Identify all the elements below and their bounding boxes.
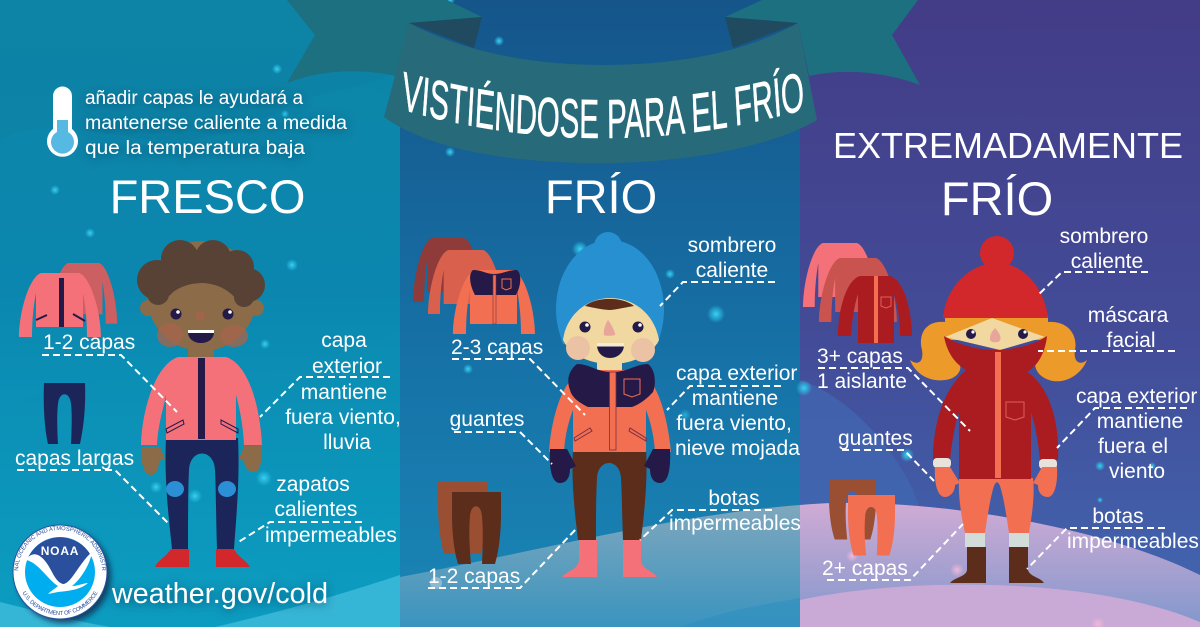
label: 2+ capas: 2+ capas <box>822 557 908 580</box>
label: sombrero: caliente <box>696 259 768 282</box>
ribbon right fold <box>725 17 798 48</box>
gloves <box>550 449 670 483</box>
mouth <box>188 332 214 343</box>
label: 2+ capas <box>822 524 963 580</box>
zipper <box>610 372 616 450</box>
nose <box>990 328 1001 342</box>
pocket <box>1006 402 1024 420</box>
label: zapatos: calientes <box>275 498 357 521</box>
zipper <box>995 352 1001 478</box>
eyes <box>580 322 644 332</box>
labels: fresco <box>15 329 401 547</box>
boots <box>562 540 657 577</box>
shoes <box>155 549 250 567</box>
label: capa exterior: fuera viento, <box>285 406 401 429</box>
character: fresco <box>137 240 265 567</box>
boots <box>950 547 1044 583</box>
character: frio <box>549 232 671 577</box>
head <box>137 240 265 351</box>
logo: NOAA: U.S. DEPARTMENT OF COMMERCE <box>23 590 98 615</box>
thumbnail: pants extremadamente frio <box>829 479 895 555</box>
label: zapatos <box>237 473 397 547</box>
face <box>563 298 659 364</box>
jacket <box>549 370 671 452</box>
label: capa exterior <box>667 362 800 460</box>
label: guantes <box>838 427 934 481</box>
hands <box>141 446 262 475</box>
banner ribbon <box>287 0 920 163</box>
hair <box>137 240 265 307</box>
nose <box>604 320 615 336</box>
label: mascara: máscara <box>1088 304 1169 327</box>
label: mascara <box>1038 304 1175 352</box>
mittens <box>935 467 1057 497</box>
panel: background frio <box>400 0 800 627</box>
note text <box>85 88 347 159</box>
ribbon left tail <box>287 0 482 83</box>
thumbnail: jackets fresco <box>19 263 117 337</box>
label: capa exterior: viento <box>1109 460 1165 483</box>
icon: thermometer <box>47 86 78 157</box>
ribbon centre <box>384 23 817 163</box>
label: capa exterior: mantiene <box>301 381 387 404</box>
label: 1-2 capas <box>428 528 577 588</box>
yoke <box>568 364 655 407</box>
pants <box>166 438 239 549</box>
heading: extremadamente frio <box>833 125 1183 225</box>
label: capas largas <box>15 447 170 525</box>
label: capa exterior <box>260 329 401 454</box>
label: sombrero <box>660 234 776 306</box>
cuffs <box>933 458 1057 469</box>
label: botas <box>640 487 801 540</box>
heading: frio: FRÍO <box>545 170 657 223</box>
label: zapatos: impermeables <box>265 524 397 547</box>
label: capa exterior: lluvia <box>323 431 371 454</box>
hat <box>943 236 1048 318</box>
thumbnail: pants frio <box>438 482 501 564</box>
pants <box>959 478 1034 533</box>
character: extremadamente frio <box>910 236 1087 583</box>
label: sombrero <box>1037 225 1148 296</box>
mouth <box>597 345 624 358</box>
label: capa exterior: mantiene <box>1097 410 1183 433</box>
label: capa exterior: fuera el <box>1098 435 1168 458</box>
hair <box>910 316 1087 381</box>
note text: mantenerse caliente a medida <box>85 113 347 134</box>
panel: background extremadamente frio <box>800 0 1200 627</box>
label: guantes: guantes <box>838 427 913 450</box>
label: botas: impermeables <box>669 512 801 535</box>
cheeks <box>566 336 655 362</box>
labels: frio <box>428 234 801 588</box>
label: 2-3 capas <box>451 336 585 415</box>
label: sombrero: caliente <box>1071 250 1143 273</box>
face <box>945 318 1045 350</box>
label: 3+ capas: 1 aislante <box>817 370 907 393</box>
label: capas largas: capas largas <box>15 447 134 470</box>
label: zapatos: zapatos <box>276 473 350 496</box>
pants <box>572 450 647 540</box>
neck <box>597 358 622 374</box>
side pockets <box>574 428 646 441</box>
label: botas: impermeables <box>1067 530 1199 553</box>
label: botas <box>1027 505 1199 569</box>
ribbon right tail <box>725 0 920 85</box>
label: sombrero: sombrero <box>1060 225 1148 248</box>
logo: NOAA <box>12 524 115 627</box>
ribbon left fold <box>409 17 482 48</box>
label: 3+ capas: 3+ capas <box>817 345 903 368</box>
url: weather.gov/cold <box>111 578 328 610</box>
socks <box>965 533 1029 547</box>
label: guantes <box>450 408 552 464</box>
logo: NOAA: NATIONAL OCEANIC AND ATMOSPHERIC ADMINISTRATION <box>14 526 106 571</box>
hat <box>556 232 664 344</box>
label: capa exterior <box>1057 385 1197 483</box>
thumbnail: jackets extremadamente frio <box>803 243 912 343</box>
title: VISTIÉNDOSE PARA EL FRÍO <box>404 68 803 138</box>
label: capa exterior: fuera viento, <box>676 412 792 435</box>
knees <box>166 481 236 497</box>
eyes <box>170 308 234 320</box>
label: botas: botas <box>1092 505 1144 528</box>
zipper <box>198 358 205 439</box>
label: 1-2 capas <box>42 331 177 412</box>
hair <box>585 299 634 310</box>
panel: background fresco <box>0 0 400 627</box>
label: 1-2 capas: 1-2 capas <box>43 331 135 354</box>
label: capa exterior: mantiene <box>692 387 778 410</box>
jacket with mask <box>933 336 1058 479</box>
heading: fresco: FRESCO <box>110 170 305 223</box>
label: guantes: guantes <box>450 408 524 431</box>
label: capa exterior: exterior <box>312 355 382 378</box>
neck <box>188 345 214 359</box>
heading: extremadamente frio: EXTREMADAMENTE <box>833 125 1183 166</box>
label: sombrero: sombrero <box>688 234 776 257</box>
pockets <box>166 420 238 433</box>
label: botas: botas <box>708 487 760 510</box>
label: capa exterior: capa exterior <box>1076 385 1197 408</box>
nose and cheeks <box>157 311 248 347</box>
label: 1-2 capas: 1-2 capas <box>428 565 520 588</box>
note text: que la temperatura baja <box>85 138 305 159</box>
labels: extremadamente frio <box>817 225 1199 580</box>
logo: NOAA: NOAA <box>41 544 79 558</box>
jacket <box>141 357 262 445</box>
heading: extremadamente frio: FRÍO <box>941 172 1053 225</box>
label: mascara: facial <box>1106 329 1156 352</box>
label: 2-3 capas: 2-3 capas <box>451 336 543 359</box>
label: capa exterior: nieve mojada <box>675 437 800 460</box>
label: 3+ capas <box>817 345 970 431</box>
eyes <box>966 329 1028 339</box>
thumbnail: pants fresco <box>44 383 85 444</box>
label: capa exterior: capa <box>321 329 367 352</box>
label: capa exterior: capa exterior <box>676 362 797 385</box>
note text: añadir capas le ayudará a <box>85 88 303 109</box>
chest pocket <box>624 379 640 397</box>
thumbnail: jackets frio <box>413 238 535 334</box>
